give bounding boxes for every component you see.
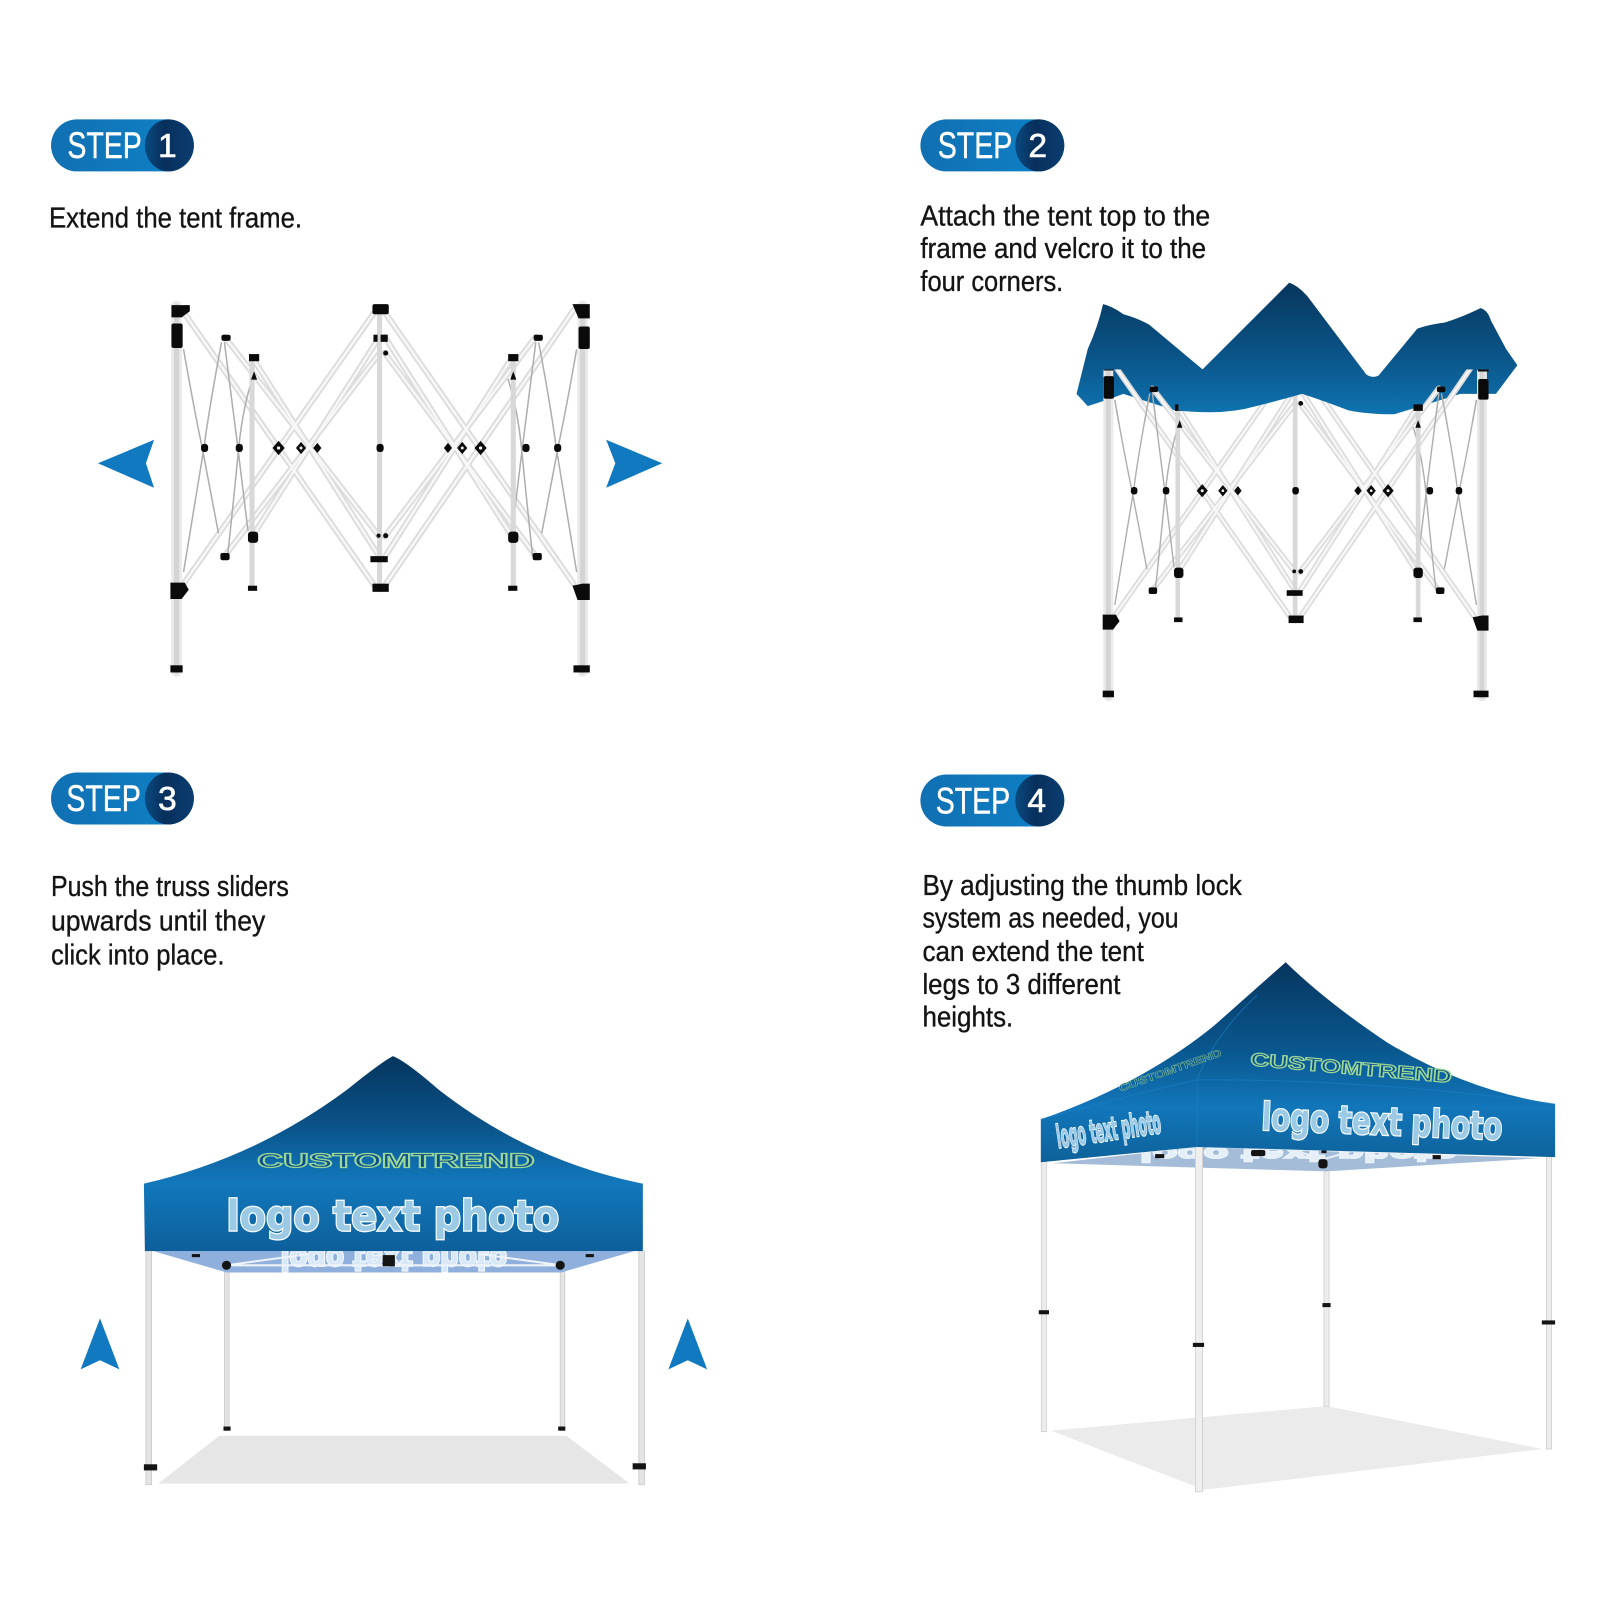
panel: step 3: [51, 772, 707, 1485]
step badge 1: STEP: [67, 125, 142, 166]
arrow up left: [81, 1318, 119, 1369]
instruction text: frame and velcro it to the: [920, 233, 1206, 265]
thumb lock clips: [1039, 1303, 1555, 1347]
instruction text: [922, 870, 1242, 1034]
instruction text: Push the truss sliders: [51, 871, 289, 903]
canopy logo text: logo text photo: [227, 1192, 559, 1241]
frame with canopy draped: [1077, 283, 1517, 697]
truss joints: [1155, 1149, 1441, 1168]
fully raised tent front view: [144, 1056, 646, 1485]
tent legs: [146, 1251, 644, 1485]
ground shadow: [158, 1436, 630, 1484]
step badge 3: [51, 772, 194, 824]
step badge 4: STEP: [936, 780, 1010, 821]
mirrored print seen through canopy: logo text photo: [1140, 1142, 1457, 1166]
canopy: [1041, 962, 1555, 1162]
instruction text: four corners.: [920, 266, 1063, 298]
valance logo text right: logo text photo: [1261, 1095, 1503, 1149]
step badge 2: STEP: [938, 125, 1012, 166]
truss and joints under canopy: [192, 1254, 594, 1270]
leg clips: [144, 1427, 646, 1470]
roof brand text left: CUSTOMTREND: [1118, 1048, 1223, 1095]
canopy underside: [153, 1251, 635, 1272]
instruction text: heights.: [922, 1002, 1013, 1034]
ground shadow: [1051, 1406, 1543, 1490]
step badge 3: STEP: [66, 778, 141, 819]
instruction text: legs to 3 different: [922, 969, 1120, 1001]
front corner seam: [1041, 995, 1555, 1147]
arrow right: [606, 440, 662, 488]
instruction text: click into place.: [51, 939, 224, 971]
instruction text: system as needed, you: [922, 903, 1179, 935]
front leg: [1195, 1145, 1203, 1492]
instruction text: can extend the tent: [922, 936, 1144, 968]
panel: step 4: [920, 774, 1555, 1492]
step badge 1: [51, 119, 194, 171]
panel: step 1: [49, 119, 662, 672]
instruction text: Attach the tent top to the: [920, 201, 1210, 233]
tent back and side legs: [1041, 1155, 1552, 1449]
tent with adjusted legs, perspective view: logo text photo: [1054, 1105, 1163, 1156]
canopy: [144, 1056, 643, 1251]
roof brand text right: CUSTOMTREND: [1250, 1048, 1453, 1087]
instruction text: [51, 871, 289, 971]
instruction text: By adjusting the thumb lock: [922, 870, 1242, 902]
mirrored print seen through canopy: logo text photo: [281, 1241, 507, 1276]
step badge 4: 4: [1027, 783, 1046, 820]
tent frame extended: [170, 304, 590, 672]
step badge 2: [920, 119, 1064, 171]
step badge 2: 2: [1028, 128, 1047, 165]
arrow left: [98, 440, 154, 488]
step badge 4: [920, 774, 1064, 827]
arrow up right: [668, 1318, 707, 1369]
instruction text: [920, 201, 1210, 298]
tent with adjusted legs, perspective view: [1039, 962, 1555, 1492]
panel: step 2: [920, 119, 1517, 697]
instruction text: Extend the tent frame.: [49, 203, 302, 235]
step badge 1: 1: [158, 128, 177, 165]
step badge 3: 3: [158, 781, 177, 818]
canopy brand text: CUSTOMTREND: [257, 1150, 535, 1172]
canopy underside: [1053, 1147, 1540, 1171]
instruction text: upwards until they: [51, 906, 266, 938]
